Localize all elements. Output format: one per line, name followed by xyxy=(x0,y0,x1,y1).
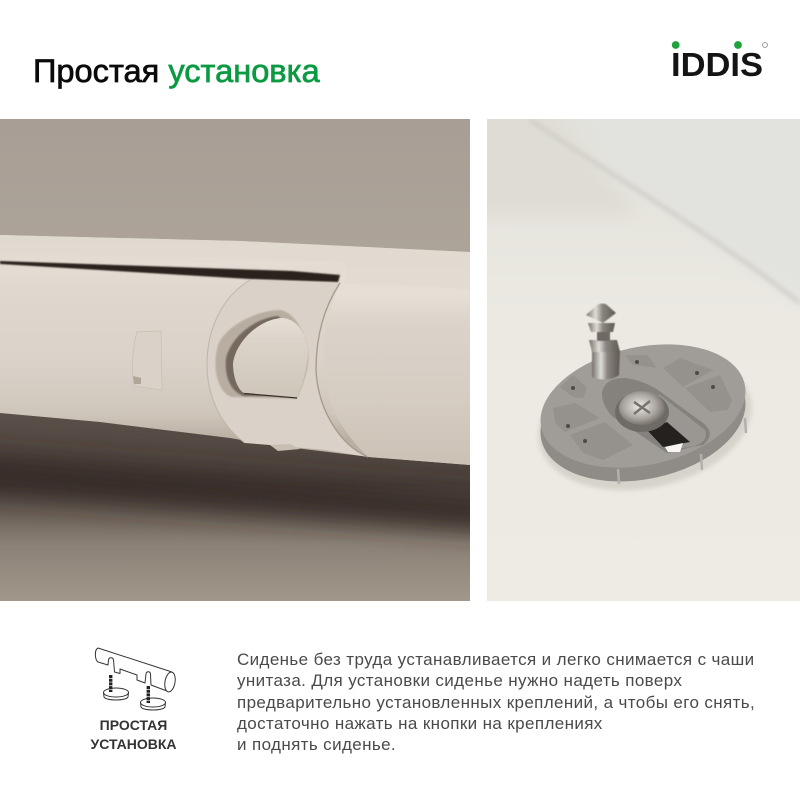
description text: предварительно установленных креплений, а чтобы его снять, xyxy=(237,693,755,712)
surface xyxy=(487,119,800,601)
embossed mark xyxy=(133,331,162,390)
slot xyxy=(602,378,710,453)
icon caption: ПРОСТАЯ xyxy=(100,717,167,733)
description text: и поднять сиденье. xyxy=(237,735,396,754)
seat cover right xyxy=(323,252,470,465)
disc face xyxy=(529,327,757,485)
diagonal edge xyxy=(530,120,800,303)
ribs xyxy=(618,418,746,484)
pin xyxy=(586,304,620,379)
button xyxy=(233,318,308,398)
photo: mounting plate xyxy=(487,119,800,601)
description text: достаточно нажать на кнопки на креплениях xyxy=(237,714,603,733)
collar xyxy=(207,280,368,457)
shadow band xyxy=(0,450,550,535)
washer and screw xyxy=(615,392,669,432)
title: Простая установка xyxy=(33,52,320,89)
disc side xyxy=(529,337,757,499)
photo: seat hinge button xyxy=(0,119,470,601)
recessed pockets xyxy=(553,355,732,460)
description text xyxy=(237,650,755,754)
lower tab xyxy=(270,444,300,451)
slit xyxy=(0,261,340,282)
disc shadow xyxy=(526,335,764,509)
description text: Сиденье без труда устанавливается и легко снимается с чаши xyxy=(237,650,755,669)
icon caption xyxy=(90,717,177,752)
top lip xyxy=(0,235,470,290)
seat body xyxy=(0,235,470,465)
background grey area xyxy=(560,90,800,340)
icon caption: УСТАНОВКА xyxy=(90,736,177,752)
background xyxy=(0,119,470,601)
icon: seat hinge with mounts xyxy=(94,648,176,710)
holes xyxy=(566,360,715,443)
description text: унитаза. Для установки сиденье нужно надеть поверх xyxy=(237,671,682,690)
recess xyxy=(215,310,308,399)
